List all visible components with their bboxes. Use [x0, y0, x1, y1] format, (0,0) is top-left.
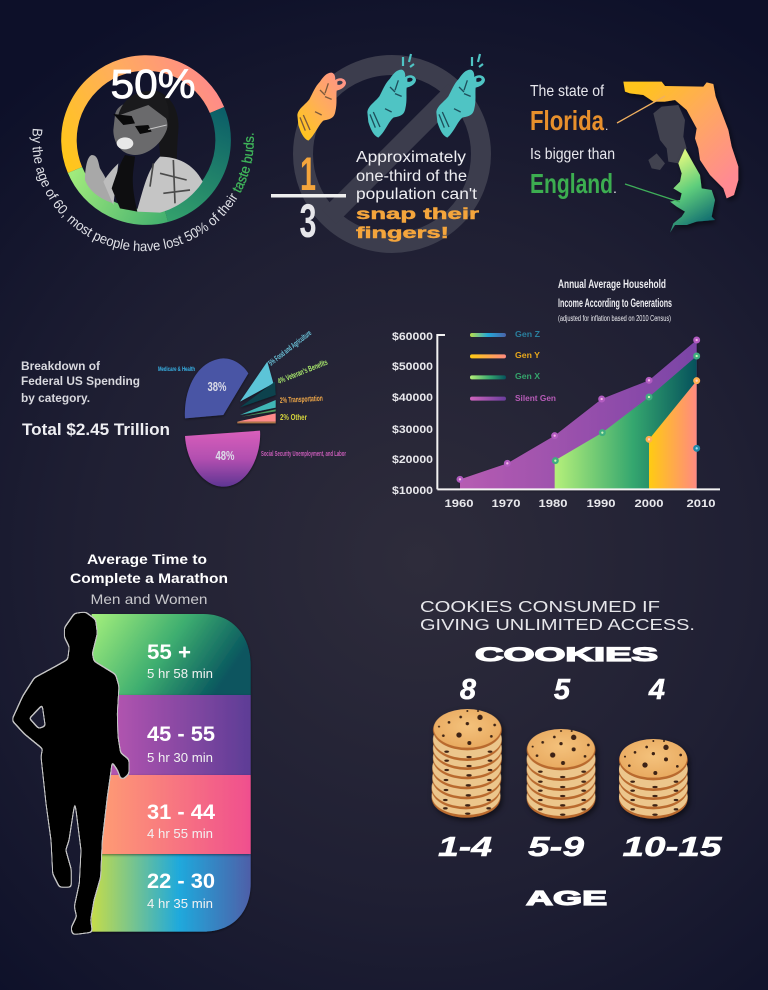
- x axis labels: 2010: [686, 498, 716, 510]
- axis title: age: AGE: [526, 888, 607, 910]
- marathon heading: Average Time to: [87, 551, 207, 567]
- map shapes: [623, 82, 738, 233]
- spending heading: Federal US Spending: [21, 376, 140, 388]
- icon: teal hand: [367, 70, 416, 138]
- 50%: 50%: [110, 61, 196, 107]
- pie labels: [158, 328, 346, 463]
- area: Gen X: [555, 356, 697, 489]
- y axis labels: $50000: [392, 361, 433, 373]
- data points: [458, 338, 699, 482]
- pointer lines: [617, 96, 680, 202]
- pie labels: Social Security Unemployment, and Labor: [261, 451, 346, 458]
- pie labels: 4% Veteran's Benefits: [276, 358, 329, 386]
- fraction one third: 3: [300, 194, 316, 247]
- stack: 8 cookies: [432, 709, 502, 818]
- cookie counts: 8: [460, 674, 477, 706]
- axes: [437, 335, 720, 489]
- area: Silent Gen: [460, 340, 697, 489]
- legend labels: Silent Gen: [515, 394, 556, 403]
- heading text: England: [530, 168, 613, 199]
- legend labels: [515, 330, 556, 403]
- x axis labels: 1990: [586, 498, 616, 510]
- band labels: 55 +: [147, 641, 191, 664]
- band labels: 31 - 44: [147, 801, 215, 824]
- panel: cookies: [420, 599, 722, 910]
- spending heading: [21, 361, 140, 405]
- band labels: 22 - 30: [147, 870, 215, 893]
- snap text: snap their: [356, 206, 479, 223]
- band: 31 to 44: [92, 775, 251, 854]
- pie labels: 2% Other: [280, 413, 307, 422]
- fraction one third: 1: [300, 147, 316, 200]
- panel: Florida and England: [530, 82, 738, 233]
- curved caption: By the age of 60, most people have lost 50% of their taste buds.: [29, 128, 254, 252]
- icon: teal hand snapping: [436, 70, 485, 138]
- area: Gen Y: [649, 381, 697, 489]
- pie chart: [185, 358, 276, 487]
- age labels: 1-4: [438, 831, 493, 862]
- band labels: 5 hr 30 min: [147, 751, 213, 765]
- x axis labels: 1980: [538, 498, 568, 510]
- icon: orange hand: [297, 73, 346, 141]
- pie labels: 48%: [216, 448, 235, 463]
- England: [670, 148, 715, 233]
- snap text: population can't: [356, 186, 478, 203]
- y axis labels: [392, 331, 433, 497]
- panel: marathon: [13, 551, 251, 934]
- age labels: 10-15: [622, 831, 722, 862]
- heading text: [530, 83, 617, 199]
- snap text: [356, 149, 479, 242]
- band labels: 45 - 55: [147, 723, 215, 746]
- band labels: 5 hr 58 min: [147, 667, 213, 681]
- legend bars: [470, 333, 506, 401]
- prohibition sign: [303, 65, 481, 243]
- axis title: cookies: COOKIES: [475, 645, 658, 666]
- x axis labels: 1970: [492, 498, 520, 510]
- runner silhouette: [13, 613, 128, 934]
- y axis labels: $60000: [392, 331, 433, 343]
- cookies heading: [420, 599, 695, 634]
- cookie counts: 4: [648, 674, 665, 706]
- heading text: .: [613, 180, 617, 196]
- chart title: Income According to Generations: [558, 296, 672, 310]
- heading text: .: [605, 119, 608, 133]
- area chart: [437, 333, 720, 489]
- chart title: (adjusted for inflation based on 2010 Census): [558, 314, 671, 323]
- legend labels: Gen Y: [515, 351, 541, 360]
- fraction one third: [271, 147, 346, 247]
- age labels: 5-9: [528, 831, 585, 862]
- cookies heading: COOKIES CONSUMED IF: [420, 599, 660, 616]
- donut ring: [69, 63, 223, 217]
- y axis labels: $40000: [392, 392, 433, 404]
- marathon heading: [70, 551, 228, 607]
- chart title: [558, 277, 672, 323]
- cookies heading: GIVING UNLIMITED ACCESS.: [420, 617, 695, 634]
- cookie counts: [460, 674, 665, 706]
- legend labels: Gen X: [515, 372, 541, 381]
- panel: finger snapping: [271, 54, 485, 247]
- stack: 4 cookies: [619, 739, 688, 819]
- heading text: Florida: [530, 105, 604, 136]
- band: 45 to 55: [92, 695, 251, 775]
- total: Total $2.45 Trillion: [22, 421, 170, 439]
- age bands: [13, 613, 251, 934]
- heading text: Is bigger than: [530, 146, 615, 163]
- band: 22 to 30: [92, 854, 251, 932]
- pie labels: 38%: [208, 379, 227, 394]
- y axis labels: $30000: [392, 424, 433, 436]
- photo: woman with sunglasses: [85, 90, 203, 213]
- band labels: 4 hr 55 min: [147, 827, 213, 841]
- pie labels: Medicare & Health: [158, 366, 195, 373]
- spending heading: Breakdown of: [21, 361, 100, 373]
- legend labels: Gen Z: [515, 330, 540, 339]
- stack: 5 cookies: [527, 729, 595, 819]
- band: 55 plus: [92, 614, 251, 695]
- band labels: [147, 641, 215, 911]
- band labels: 4 hr 35 min: [147, 897, 213, 911]
- snap text: Approximately: [356, 149, 466, 166]
- icon: snap sparks: [403, 54, 483, 67]
- Scotland and Ireland: [648, 105, 687, 170]
- pie labels: 2% Transportation: [280, 394, 323, 405]
- marathon heading: Men and Women: [90, 591, 208, 607]
- Florida: [623, 82, 738, 198]
- y axis labels: $20000: [392, 454, 433, 466]
- x axis labels: 1960: [444, 498, 474, 510]
- panel: federal spending: [21, 328, 346, 487]
- x axis labels: 2000: [634, 498, 664, 510]
- age labels: [438, 831, 722, 862]
- pie labels: 5% Food and Agriculture: [267, 328, 313, 368]
- y axis labels: $10000: [392, 485, 433, 497]
- spending heading: by category.: [21, 393, 90, 405]
- panel: household income chart: [392, 277, 720, 510]
- snap text: one-third of the: [356, 168, 467, 185]
- marathon heading: Complete a Marathon: [70, 570, 228, 586]
- heading text: The state of: [530, 83, 604, 100]
- panel: taste buds: [29, 55, 254, 252]
- cookie counts: 5: [554, 674, 571, 706]
- snap text: fingers!: [356, 225, 449, 242]
- x axis labels: [444, 498, 716, 510]
- chart title: Annual Average Household: [558, 277, 666, 291]
- cookie stacks: [432, 709, 688, 819]
